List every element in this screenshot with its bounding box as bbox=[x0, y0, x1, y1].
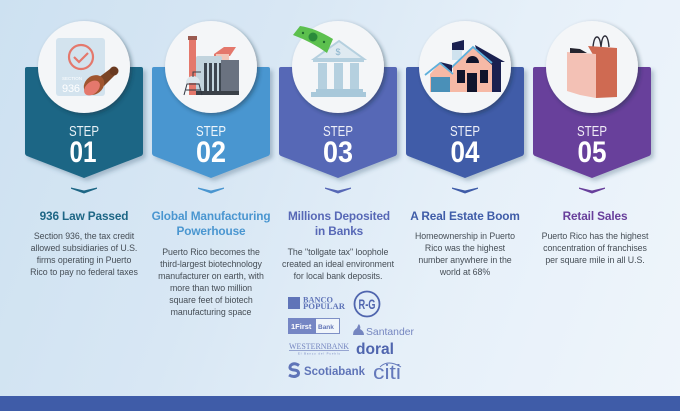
heading: Global Manufacturing Powerhouse bbox=[152, 209, 270, 238]
text: step 1 body bbox=[30, 231, 138, 277]
icon: factory bbox=[165, 21, 257, 113]
logo: Santander: Santander bbox=[366, 326, 414, 338]
icon: section 936 stamp: SECTION bbox=[62, 76, 82, 81]
text: step 5 body: concentration of franchises bbox=[543, 243, 647, 253]
step 03 label: STEP bbox=[323, 123, 353, 140]
text: step 5 body: Puerto Rico has the highest bbox=[542, 231, 648, 241]
logo: Westernbank: El Banco del Pueblo bbox=[298, 352, 340, 356]
text: step 2 body: square feet of biotech bbox=[169, 295, 253, 305]
heading: Millions Deposited in Banks: in Banks bbox=[315, 224, 363, 238]
text: step 1 body: allowed subsidiaries of U.S. bbox=[31, 243, 137, 253]
heading: Global Manufacturing Powerhouse: Global Manufacturing bbox=[152, 209, 270, 223]
panel: step 05 bbox=[533, 67, 651, 178]
panel: step 01 bbox=[25, 67, 143, 178]
heading: Millions Deposited in Banks: Millions Deposited bbox=[288, 209, 390, 223]
icon: bank with banknote bbox=[292, 21, 384, 113]
panel: step 02 bbox=[152, 67, 270, 178]
text: step 4 body: number anywhere in the bbox=[418, 255, 512, 265]
text: step 2 body: manufacturer on earth, with bbox=[158, 271, 264, 281]
logo: Scotiabank bbox=[289, 364, 366, 378]
step 05 number: 05 bbox=[578, 136, 606, 169]
chevron 2 bbox=[198, 188, 224, 194]
logo: Westernbank: WESTERNBANK bbox=[289, 341, 350, 351]
step graphics bbox=[25, 20, 656, 194]
text: step 5 body: per square mile in all U.S. bbox=[545, 255, 645, 265]
heading: Global Manufacturing Powerhouse: Powerhouse bbox=[177, 224, 245, 238]
icon: bank with banknote: $ bbox=[335, 47, 341, 57]
icon: house bbox=[419, 21, 511, 113]
heading: Millions Deposited in Banks bbox=[288, 209, 390, 238]
text: step 4 body bbox=[415, 231, 515, 277]
bank logos bbox=[288, 290, 414, 384]
step 04 label: STEP bbox=[450, 123, 480, 140]
logo: First Bank: Bank bbox=[318, 324, 334, 331]
step 01 number: 01 bbox=[70, 136, 96, 169]
logo: Westernbank bbox=[289, 341, 350, 356]
logo: Santander bbox=[353, 324, 414, 338]
step 01 label: STEP bbox=[69, 123, 99, 140]
logo: First Bank bbox=[288, 318, 340, 334]
text: step 2 body: manufacturing space bbox=[171, 307, 251, 317]
text: step 3 body: created an ideal environment bbox=[282, 259, 394, 269]
logo: R-G bbox=[354, 292, 380, 316]
heading: A Real Estate Boom: A Real Estate Boom bbox=[410, 209, 520, 223]
text: step 3 body: The "tollgate tax" loophole bbox=[288, 247, 388, 257]
chevron 1 bbox=[71, 188, 97, 194]
chevron 4 bbox=[452, 188, 478, 194]
logo: R-G: R-G bbox=[358, 296, 376, 312]
step 05 label: STEP bbox=[577, 123, 607, 140]
logo: doral: doral bbox=[356, 341, 394, 358]
step 03 number: 03 bbox=[323, 136, 353, 169]
step 04 number: 04 bbox=[450, 136, 480, 169]
text: step 4 body: Homeownership in Puerto bbox=[415, 231, 515, 241]
text: step 2 body: third-largest biotechnology bbox=[160, 259, 262, 269]
chevron 5 bbox=[579, 188, 605, 194]
icon: shopping bags bbox=[546, 21, 638, 113]
text: step 1 body: firms operating in Puerto bbox=[37, 255, 131, 265]
logo: Banco Popular bbox=[288, 296, 345, 311]
text: step 2 body bbox=[158, 247, 264, 317]
footer bar bbox=[0, 396, 680, 411]
logo: Banco Popular: POPULAR bbox=[303, 302, 345, 311]
chevron 3 bbox=[325, 188, 351, 194]
text: step 2 body: more than two million bbox=[170, 283, 252, 293]
heading: 936 Law Passed: 936 Law Passed bbox=[40, 209, 128, 223]
logo: Scotiabank: Scotiabank bbox=[304, 366, 366, 378]
text: step 2 body: Puerto Rico becomes the bbox=[162, 247, 260, 257]
text: step 5 body bbox=[542, 231, 648, 265]
text: step 1 body: Section 936, the tax credit bbox=[34, 231, 134, 241]
step 02 number: 02 bbox=[196, 136, 226, 169]
text: step 3 body: for local bank deposits. bbox=[294, 271, 382, 281]
logo: Citi: citi bbox=[373, 362, 401, 384]
text: step 4 body: world at 68% bbox=[440, 267, 490, 277]
step 02 label: STEP bbox=[196, 123, 226, 140]
panel: step 04 bbox=[406, 67, 524, 178]
text: step 4 body: Rico was the highest bbox=[425, 243, 505, 253]
text: step 3 body bbox=[282, 247, 394, 281]
icon: section 936 stamp: 936 bbox=[62, 83, 80, 95]
heading: Retail Sales: Retail Sales bbox=[563, 209, 627, 223]
icon: section 936 stamp bbox=[38, 21, 130, 113]
text: step 1 body: Rico to pay no federal taxes bbox=[30, 267, 138, 277]
logo: Banco Popular: BANCO bbox=[303, 296, 333, 304]
logo: First Bank: 1First bbox=[291, 322, 312, 331]
panel: step 03 bbox=[279, 67, 397, 178]
